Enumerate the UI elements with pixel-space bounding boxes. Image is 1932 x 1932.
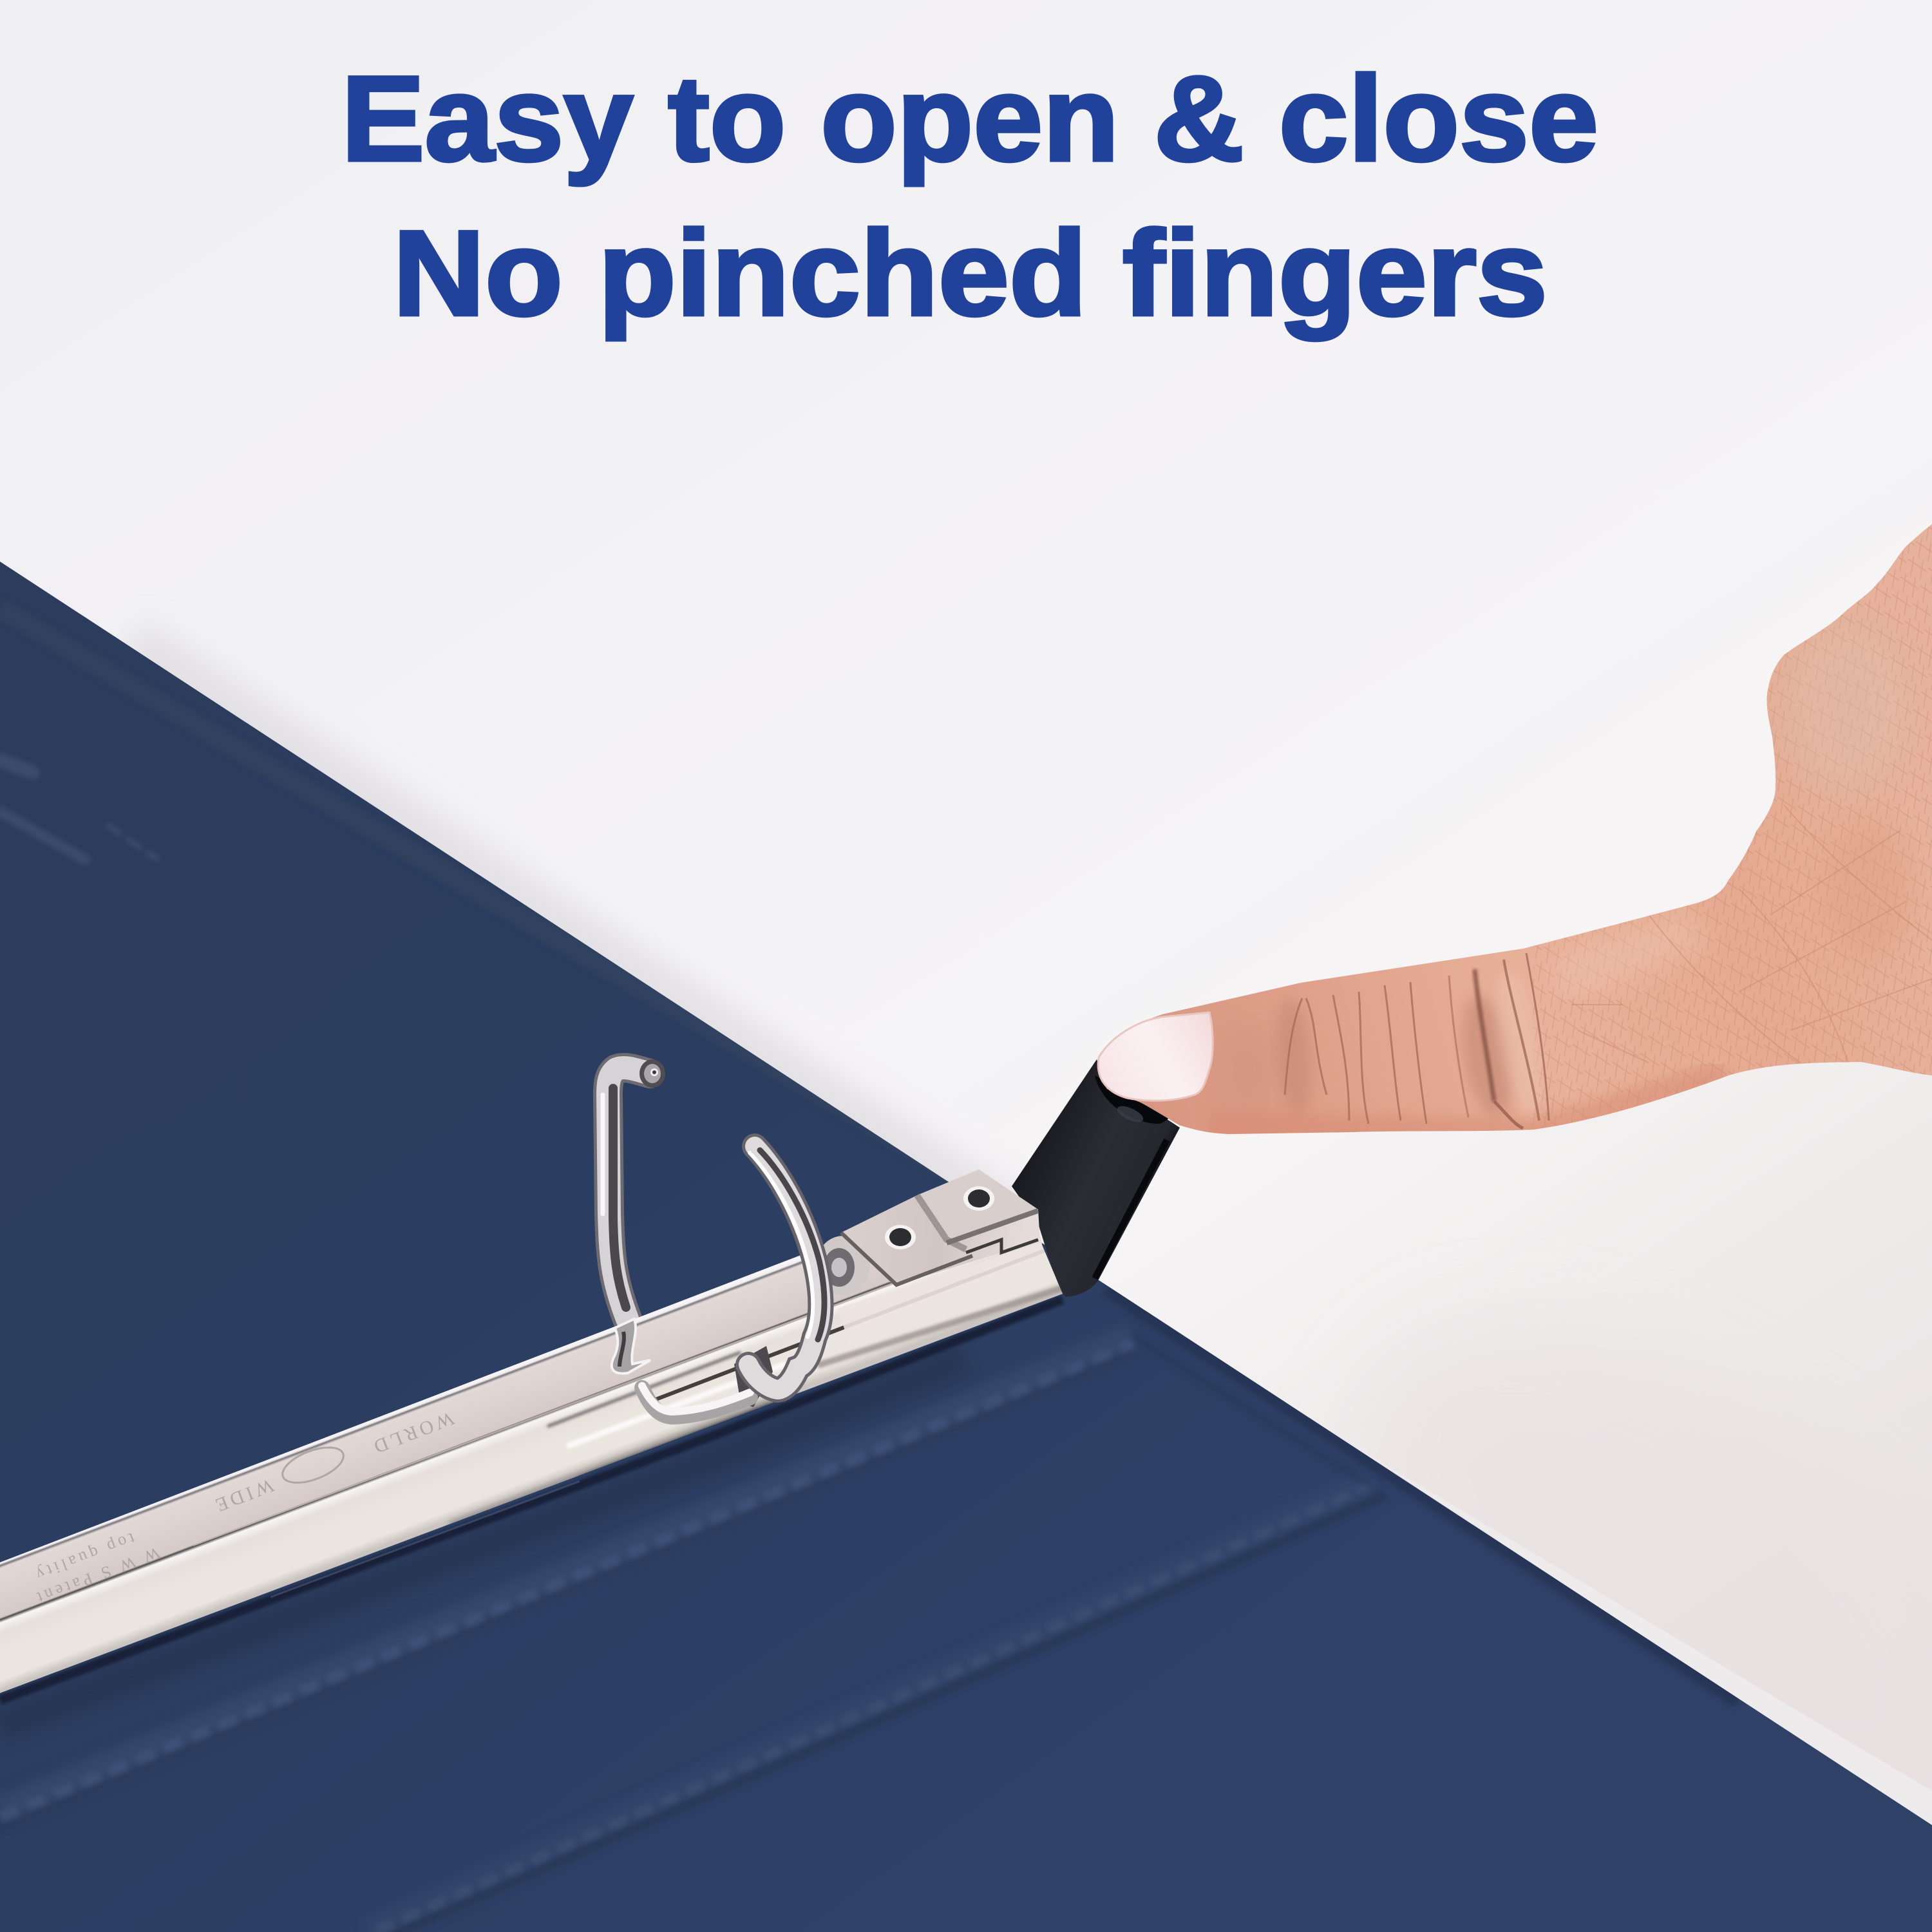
ring two, open curved ring: [748, 1146, 824, 1390]
title line 2: No pinched fingers: [393, 205, 1548, 341]
slot notch: [734, 1346, 773, 1407]
skin texture: [1533, 515, 1932, 1133]
bar lower chrome reflections: [451, 1404, 773, 1528]
knuckle shading: [1454, 992, 1521, 1121]
first knuckle creases: [1285, 982, 1426, 1124]
engraved WIDE: WIDE: [210, 1474, 276, 1517]
skin shading: [1211, 1075, 1726, 1133]
engraved bar lettering: [30, 1407, 457, 1609]
second knuckle creases: [1449, 953, 1549, 1128]
faint print on inside cover: [0, 760, 157, 860]
engraved WORLD: WORLD: [368, 1407, 457, 1459]
bar slot groove: [644, 1246, 1056, 1404]
title line 1: Easy to open & close: [341, 51, 1598, 186]
shadow under metal bar: [0, 1300, 1063, 1700]
engraved logo: [278, 1441, 348, 1490]
binder cover: [0, 562, 1932, 1932]
hand skin creases: [1571, 805, 1932, 1069]
cover inner fold band: [537, 913, 949, 1182]
engraved W W S Patent: W W S Patent: [32, 1543, 162, 1609]
ring one tip: [639, 1059, 665, 1088]
upper stitching band: [0, 1337, 1133, 1829]
dark seam along right edge: [1108, 1288, 1739, 1700]
metal ring mechanism: [0, 1059, 1180, 1700]
lever tab: [1012, 1059, 1180, 1297]
clasp in slot: [612, 1319, 650, 1374]
ring two lower hook: [642, 1386, 750, 1417]
ring one, open D shape: [603, 1068, 650, 1319]
white paper strip at binder edge: [1359, 1449, 1932, 1826]
hinge bar: [0, 1191, 1063, 1693]
fingernail: [1098, 1012, 1213, 1101]
rivet: [816, 1236, 870, 1295]
hand and pointing finger: [1098, 515, 1932, 1134]
title: [341, 51, 1598, 341]
top plate with holes: [841, 1170, 1040, 1285]
plate hole far: [963, 1186, 994, 1211]
plate hole near: [885, 1225, 916, 1249]
dark area under metal bar: [0, 1359, 966, 1726]
engraved Top quality: top quality: [30, 1529, 137, 1585]
lower stitching band: [370, 1337, 1385, 1932]
